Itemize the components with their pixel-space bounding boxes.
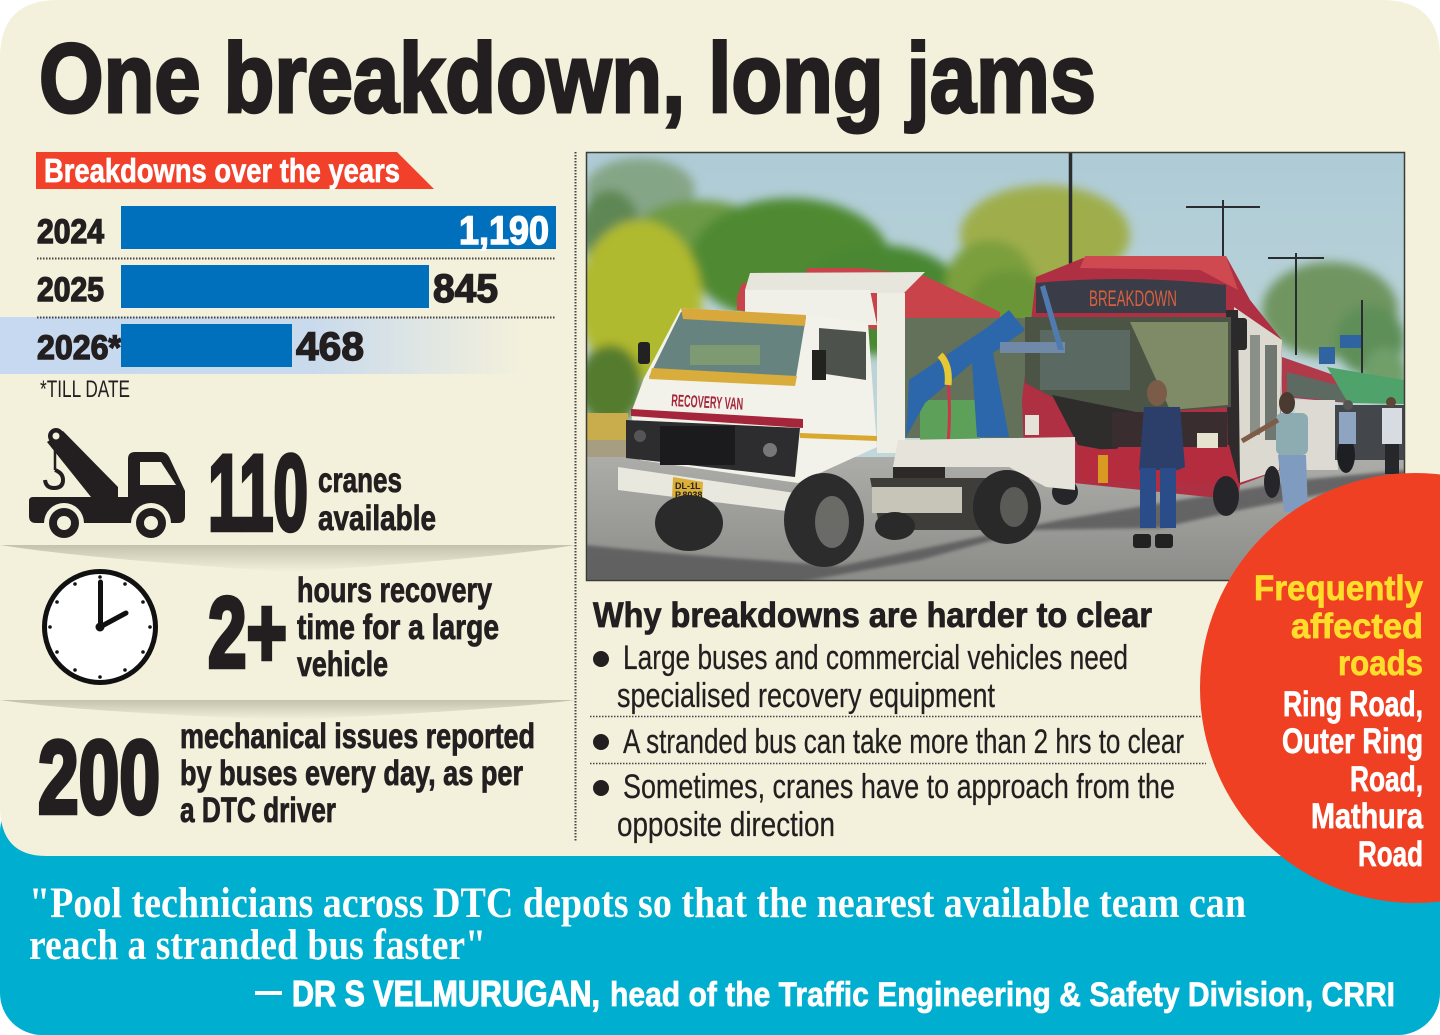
quote: [29, 880, 1395, 1014]
bar: 2026: 468: [296, 325, 364, 369]
icon: clock: [44, 572, 156, 682]
callout: frequently affected roads: Frequently: [1254, 569, 1423, 608]
panel: why breakdowns are harder to clear: [590, 596, 1206, 844]
heading: Why breakdowns are harder to clear: [593, 596, 1152, 635]
road: [586, 457, 1406, 582]
recovery van: [618, 272, 1075, 567]
callout: frequently affected roads: roads: [1338, 644, 1423, 683]
bullet 1: specialised recovery equipment: [617, 677, 995, 715]
title: One breakdown, long jams: [39, 23, 1096, 133]
stat: mechanical issues: by buses every day, as per: [180, 754, 523, 793]
stat: recovery time: [44, 571, 499, 689]
stat: cranes available: 110: [208, 432, 308, 553]
red bus behind van: [737, 268, 1000, 330]
bar: 2024: 2024: [37, 213, 104, 251]
van bed: [893, 437, 1075, 490]
stat: mechanical issues: 200: [38, 720, 160, 836]
stat: mechanical issues: a DTC driver: [180, 791, 336, 830]
photo: recovery van towing a broken-down bus: [578, 152, 1407, 582]
bar: 2025: 845: [433, 267, 498, 311]
footnote: *TILL DATE: [40, 376, 130, 403]
attribution: DR S VELMURUGAN,: [292, 973, 600, 1014]
stat: mechanical issues: mechanical issues reported: [180, 717, 535, 756]
chart heading: Breakdowns over the years: [44, 152, 400, 189]
callout: frequently affected roads: [1200, 473, 1440, 903]
stat: mechanical issues: [38, 717, 535, 836]
bullet 3: Sometimes, cranes have to approach from the: [623, 768, 1175, 806]
panel: breakdowns bar chart: [0, 152, 556, 403]
quote: "Pool technicians across DTC depots so that the nearest available team can: [29, 880, 1246, 927]
bar: 2025: [37, 265, 498, 311]
quote panel background: [0, 790, 1440, 1035]
recovery van: RECOVERY VAN: [671, 391, 744, 414]
background traffic: [1282, 335, 1404, 474]
bullet 3: opposite direction: [617, 806, 835, 844]
bystander in grey shirt: [1242, 392, 1308, 512]
bullet 1: [593, 639, 1128, 715]
bystander in blue shirt: [1133, 380, 1185, 548]
bar: 2026: 2026*: [37, 329, 122, 367]
trees: [578, 158, 1407, 425]
bar: 2025: 2025: [37, 271, 104, 309]
bullet 2: A stranded bus can take more than 2 hrs to clear: [623, 723, 1184, 761]
stat: recovery time: hours recovery: [297, 571, 492, 610]
recovery van: DL-1L: [675, 481, 701, 491]
stat: recovery time: 2+: [208, 577, 287, 689]
quote: reach a stranded bus faster": [29, 922, 486, 969]
attribution: [255, 973, 1395, 1014]
bullet 3: [593, 768, 1175, 844]
stat: cranes available: available: [318, 499, 436, 538]
poles: [1070, 152, 1362, 380]
blue crane arm: [906, 285, 1065, 445]
bar: 2024: 1,190: [459, 209, 549, 253]
stat: cranes available: [29, 428, 436, 553]
bus: BREAKDOWN: [1089, 286, 1177, 311]
callout: frequently affected roads: affected: [1291, 607, 1423, 646]
bullet 1: Large buses and commercial vehicles need: [623, 639, 1128, 677]
bus: [1022, 256, 1282, 516]
recovery van: P.8038: [675, 490, 702, 500]
wheels: [655, 495, 723, 551]
bar: 2024: [37, 206, 556, 253]
stat: recovery time: vehicle: [297, 645, 388, 684]
bar: 2026: [37, 324, 364, 369]
divider shadows: [0, 545, 575, 572]
stat: recovery time: time for a large: [297, 608, 499, 647]
icon: tow truck: [29, 428, 185, 543]
stat: cranes available: cranes: [318, 461, 402, 500]
